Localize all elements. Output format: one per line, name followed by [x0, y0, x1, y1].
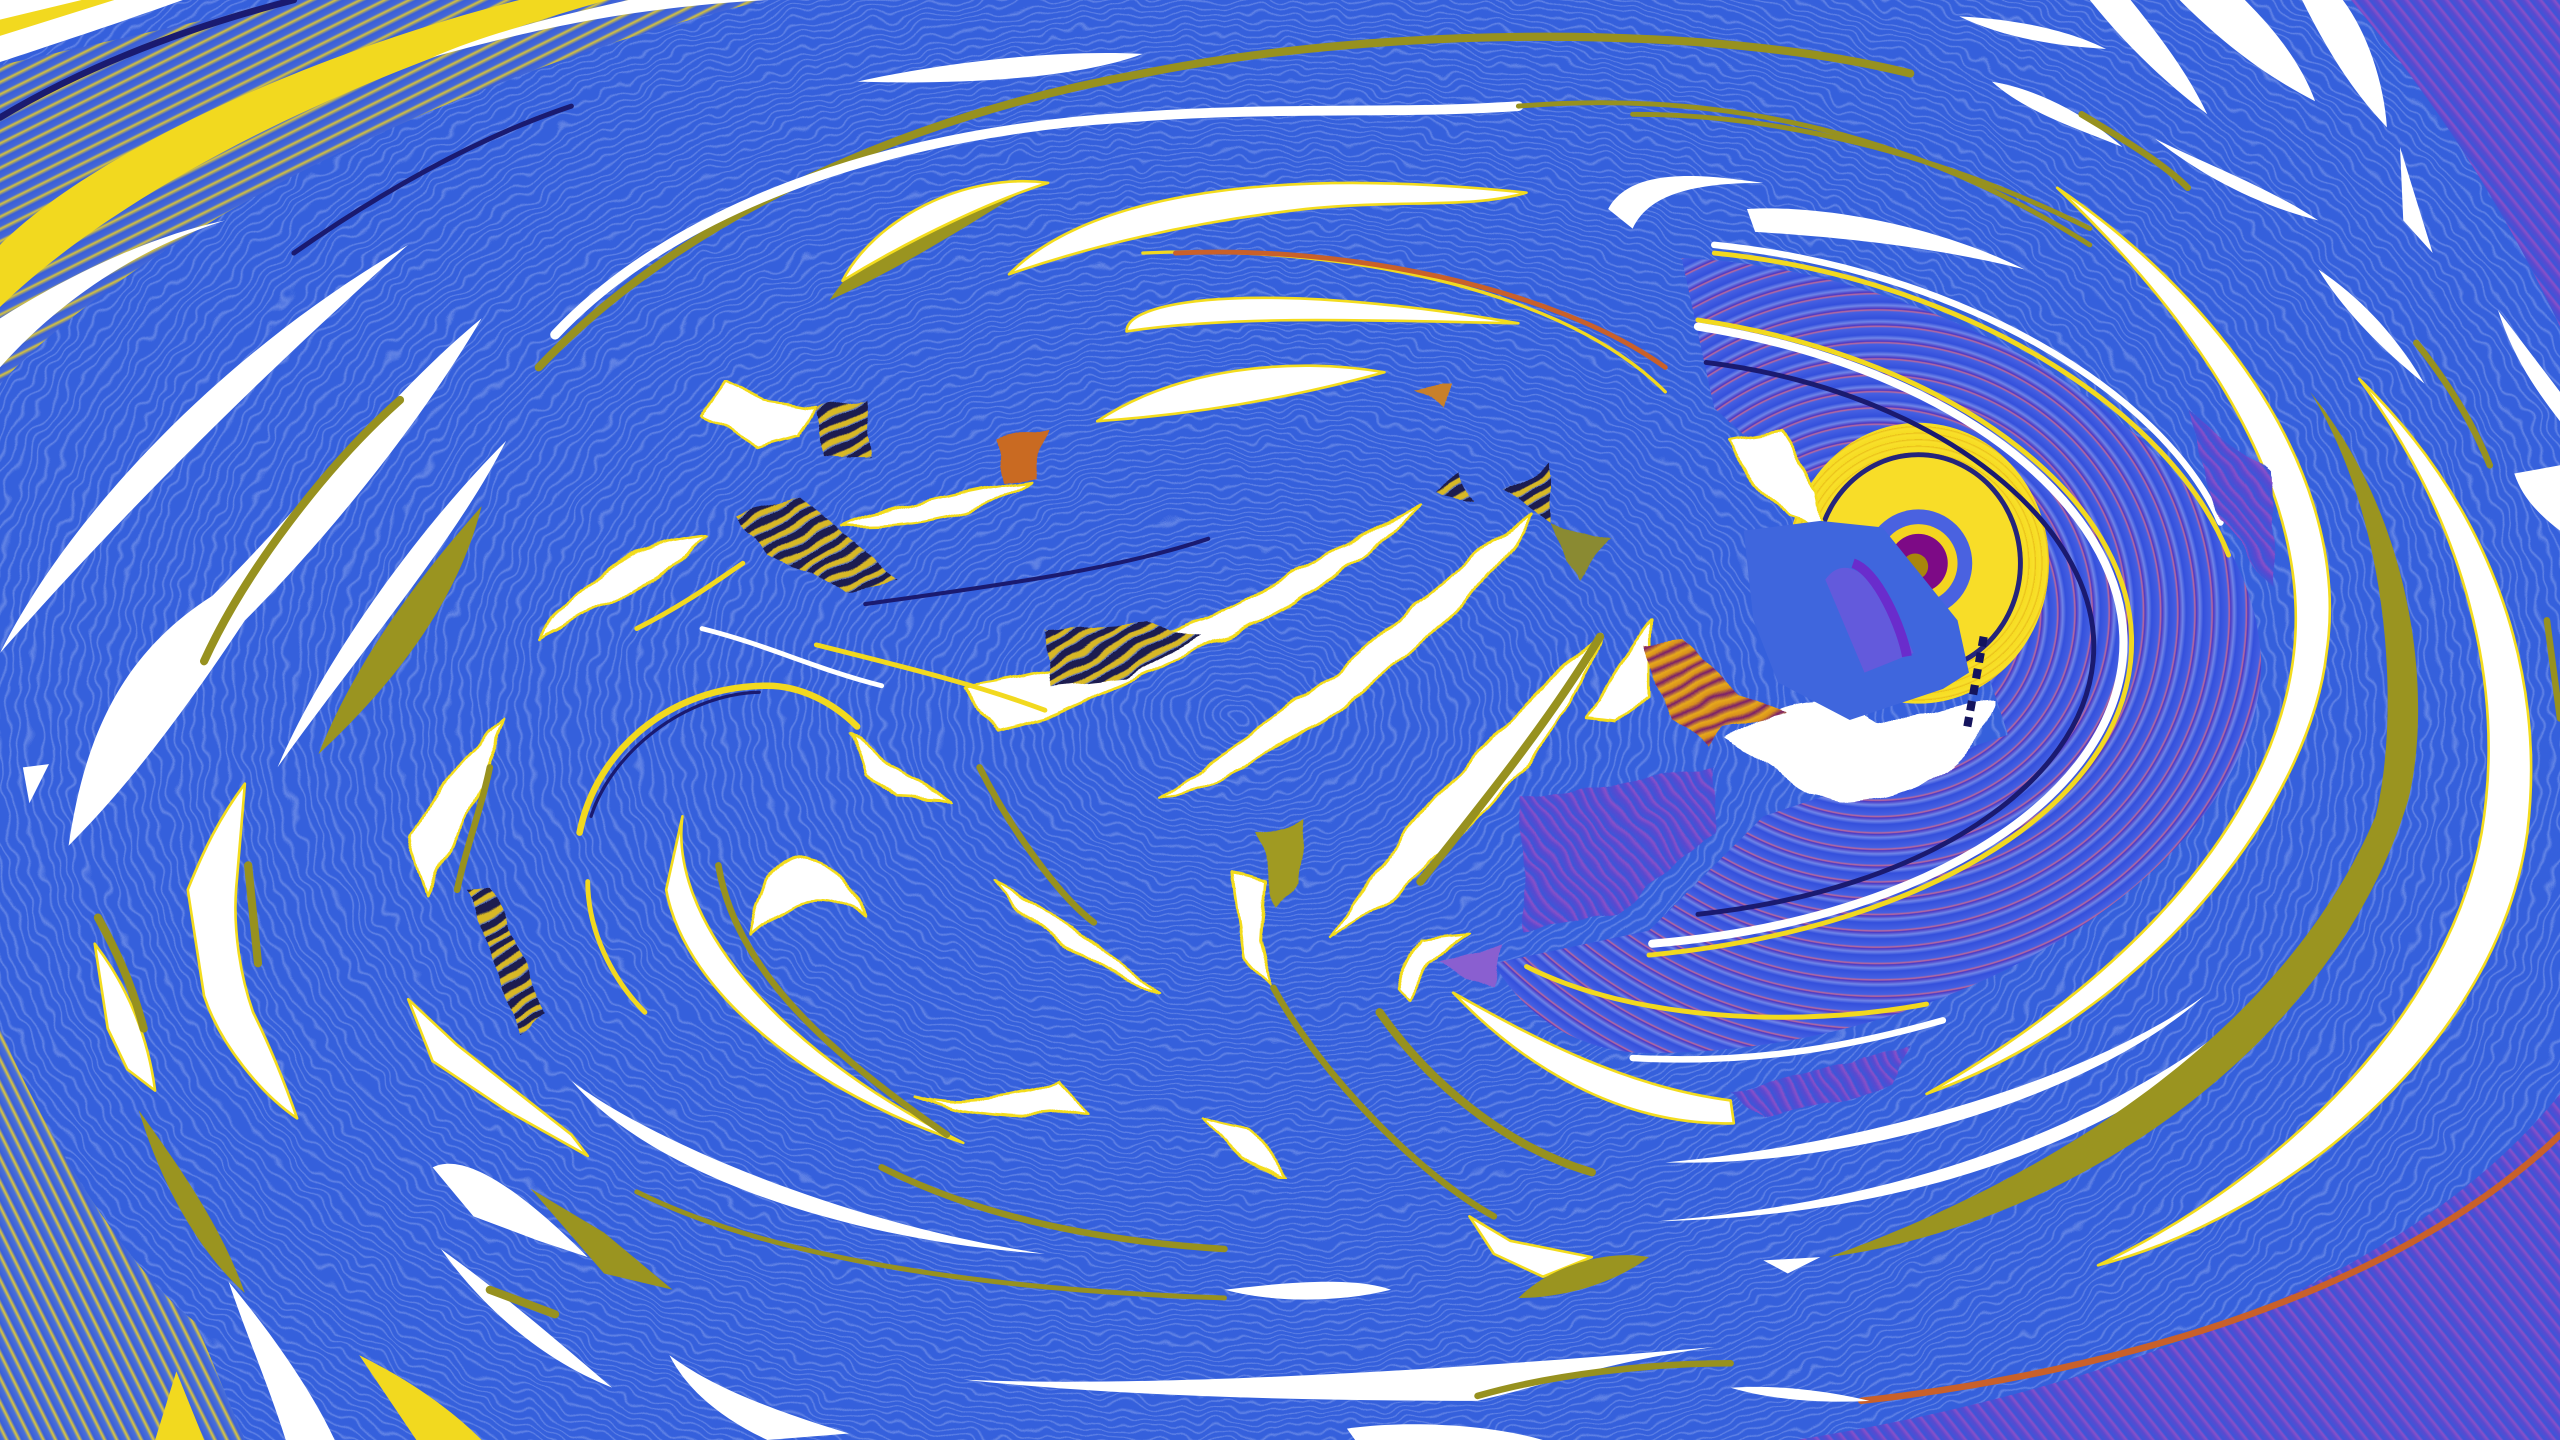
main ring system [1494, 258, 2261, 1053]
blue eddy over rings [1744, 521, 1984, 727]
top-right purple corner [2351, 0, 2560, 327]
bottom white bands [571, 1081, 1869, 1440]
jagged central white patches [408, 380, 1995, 1179]
bottom-left striped corner [0, 1029, 245, 1440]
coloured jagged accents [465, 384, 2278, 1118]
white and yellow ring arcs [1453, 245, 2229, 1123]
lower-left white bands [95, 784, 673, 1440]
inner swirl arcs [457, 539, 1600, 1216]
bottom-right purple sweep [1796, 1094, 2560, 1440]
outer swirl: left white bands [0, 245, 506, 846]
top-right white streaks [1959, 0, 2560, 531]
top-left striped corner [0, 0, 767, 384]
outer swirl: right white and olive bands [1657, 188, 2560, 1265]
outer swirl: upper white and olive bands [539, 37, 2090, 421]
